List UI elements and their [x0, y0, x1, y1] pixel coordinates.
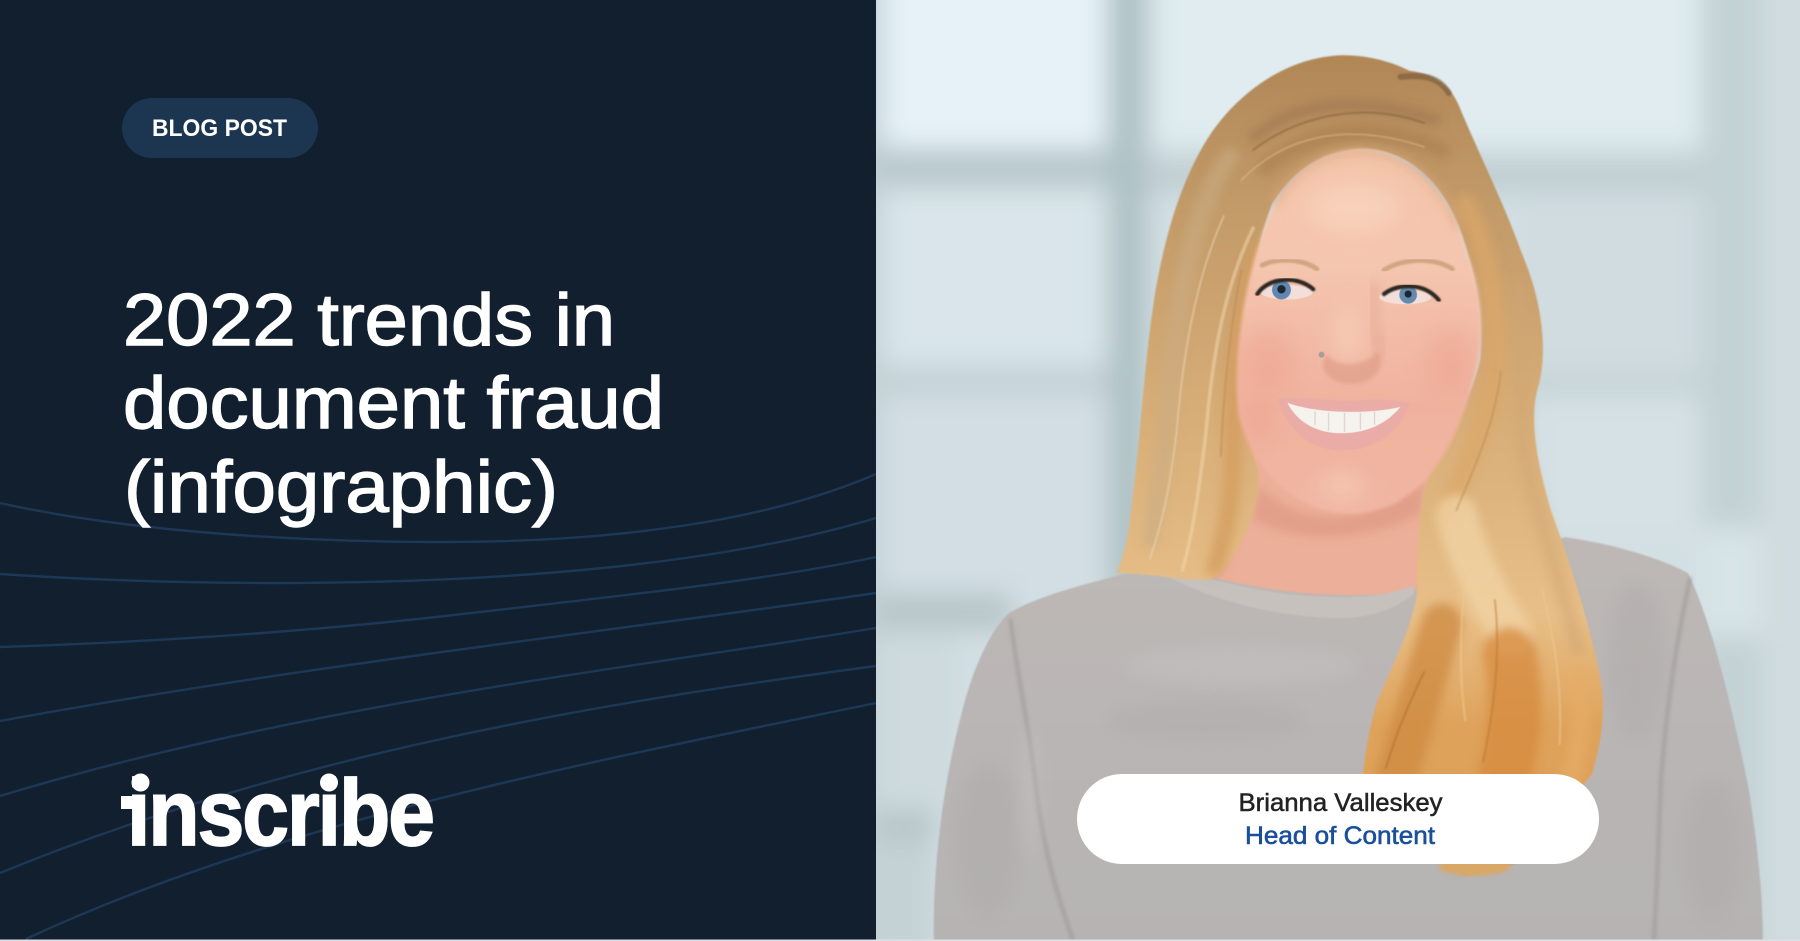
name pill [1077, 774, 1599, 864]
photo: portrait panel [841, 0, 1800, 941]
name: Brianna Valleskey [1238, 789, 1443, 817]
nose shadow [1323, 351, 1380, 384]
title: 2022 trends in [123, 280, 615, 361]
role: Head of Content [1245, 822, 1435, 850]
logo: inscribe: inscribe [127, 760, 435, 865]
eyebrows [1262, 260, 1452, 270]
neck and chest [1214, 442, 1431, 596]
sweater [934, 537, 1763, 941]
sweater mottling [956, 582, 1742, 924]
title: (infographic) [124, 447, 558, 528]
badge: blog post: BLOG POST [152, 115, 287, 142]
fine hair strands [1150, 76, 1560, 768]
hair tail below name pill [1437, 864, 1511, 878]
hairline shadow [1272, 150, 1459, 228]
hair [1116, 55, 1603, 876]
nose ring [1319, 352, 1324, 358]
badge: blog post [122, 98, 318, 158]
sweater collar [1176, 579, 1414, 618]
title [123, 280, 664, 528]
sleeve seams [1010, 577, 1690, 941]
cheek blush [1250, 336, 1476, 381]
face [1237, 149, 1481, 514]
mouth [1280, 400, 1401, 447]
bottom edge strip [0, 940, 1800, 941]
forehead and chin highlights [1314, 184, 1394, 498]
blurred window background [841, 0, 1800, 941]
eye: left [1257, 280, 1313, 299]
panel: navy left panel [0, 0, 876, 941]
eye: right [1379, 286, 1439, 304]
hair soft colour zones [1150, 105, 1580, 780]
decorative curved lines [0, 474, 876, 939]
title: document fraud [123, 363, 664, 444]
